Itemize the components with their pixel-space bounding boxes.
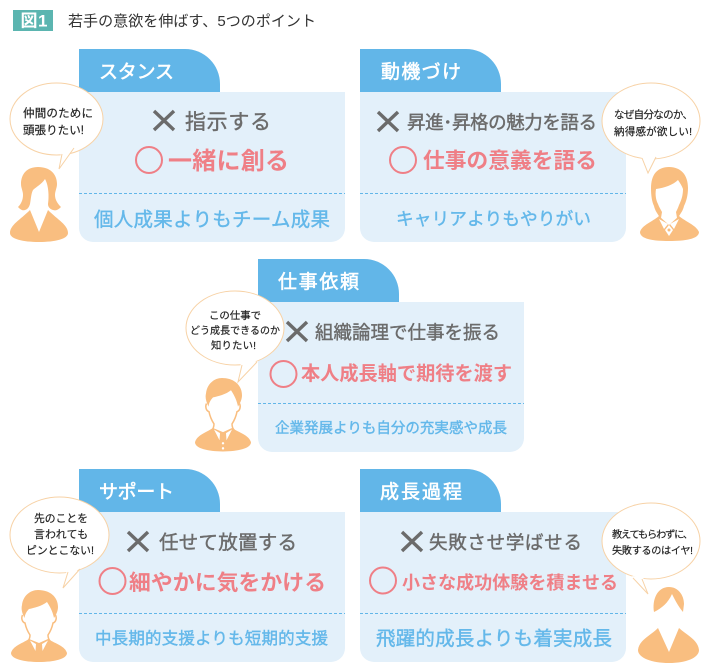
panel body — [79, 92, 345, 242]
icon: cross — [287, 322, 307, 341]
summary: 個人成果よりもチーム成果 — [94, 209, 330, 231]
icon: cross — [128, 532, 148, 551]
speech bubble: work request — [186, 291, 284, 382]
icon: circle — [390, 147, 416, 173]
speech bubble: growth process — [602, 503, 700, 594]
summary: 企業発展よりも自分の充実感や成長 — [275, 420, 507, 437]
figure label — [13, 10, 53, 31]
panel body — [79, 512, 345, 662]
panel body — [360, 92, 626, 242]
summary: 飛躍的成長よりも着実成長 — [376, 628, 612, 650]
title: 若手の意欲を伸ばす、5つのポイント — [68, 13, 316, 30]
heading: 仕事依頼 — [278, 271, 359, 293]
panel: growth process — [360, 469, 626, 662]
do-not text: 任せて放置する — [159, 532, 297, 554]
speech bubble: work request: 知りたい! — [211, 339, 256, 352]
tab: stance — [79, 49, 220, 92]
speech bubble: motivation: 納得感が欲しい! — [614, 125, 692, 138]
do-not text: 指示する — [185, 111, 271, 134]
do-not text: 昇進･昇格の魅力を語る — [407, 112, 597, 133]
panel body — [258, 302, 524, 452]
icon: circle — [136, 147, 162, 173]
heading: 成長過程 — [380, 481, 462, 503]
heading: サポート — [99, 481, 174, 503]
panel: work request — [258, 259, 524, 452]
tab: motivation — [360, 49, 501, 92]
do text: 細やかに気をかける — [129, 570, 326, 595]
heading: スタンス — [99, 61, 174, 83]
do text: 一緒に創る — [168, 148, 289, 175]
summary: 中長期的支援よりも短期的支援 — [95, 629, 328, 648]
speech bubble: motivation: なぜ自分なのか、 — [614, 108, 693, 121]
speech bubble: motivation — [602, 83, 700, 173]
speech bubble: growth process: 教えてもらわずに、 — [612, 528, 693, 541]
speech bubble: stance: 頭張りたい! — [23, 124, 84, 137]
icon: woman with hair up — [638, 587, 699, 663]
speech bubble: support: 先のことを — [34, 512, 88, 525]
speech bubble: support — [10, 497, 109, 588]
tab: growth process — [360, 469, 501, 512]
speech bubble: work request: この仕事で — [209, 309, 261, 322]
icon: woman — [10, 167, 68, 242]
speech bubble: stance: 仲間のために — [23, 106, 93, 120]
figure label: 図1 — [20, 12, 48, 30]
do text: 仕事の意義を語る — [423, 148, 597, 173]
icon: cross — [378, 112, 398, 131]
speech bubble: support: ピンとこない! — [26, 544, 94, 557]
do-not text: 組織論理で仕事を振る — [315, 322, 500, 343]
do text: 小さな成功体験を積ませる — [402, 572, 618, 593]
icon: man with buttons — [195, 378, 251, 451]
icon: circle — [370, 568, 396, 594]
speech bubble: stance — [10, 83, 103, 169]
heading: 動機づけ — [381, 61, 461, 83]
panel body — [360, 512, 626, 662]
icon: circle — [270, 361, 296, 387]
icon: circle — [100, 568, 126, 594]
panel: support — [79, 469, 345, 662]
panel: motivation — [360, 49, 626, 242]
speech bubble: work request: どう成長できるのか — [190, 325, 280, 337]
icon: man — [11, 590, 67, 662]
tab: support — [79, 469, 220, 512]
do text: 本人成長軸で期待を渡す — [301, 362, 512, 385]
panel: stance — [79, 49, 345, 242]
summary: キャリアよりもやりがい — [396, 209, 591, 229]
do-not text: 失敗させ学ばせる — [429, 532, 582, 553]
tab: work request — [258, 259, 399, 302]
speech bubble: growth process: 失敗するのはイヤ! — [612, 544, 693, 557]
icon: woman in collar — [640, 167, 699, 241]
icon: cross — [402, 532, 422, 551]
speech bubble: support: 言われても — [34, 528, 88, 541]
icon: cross — [154, 111, 174, 130]
